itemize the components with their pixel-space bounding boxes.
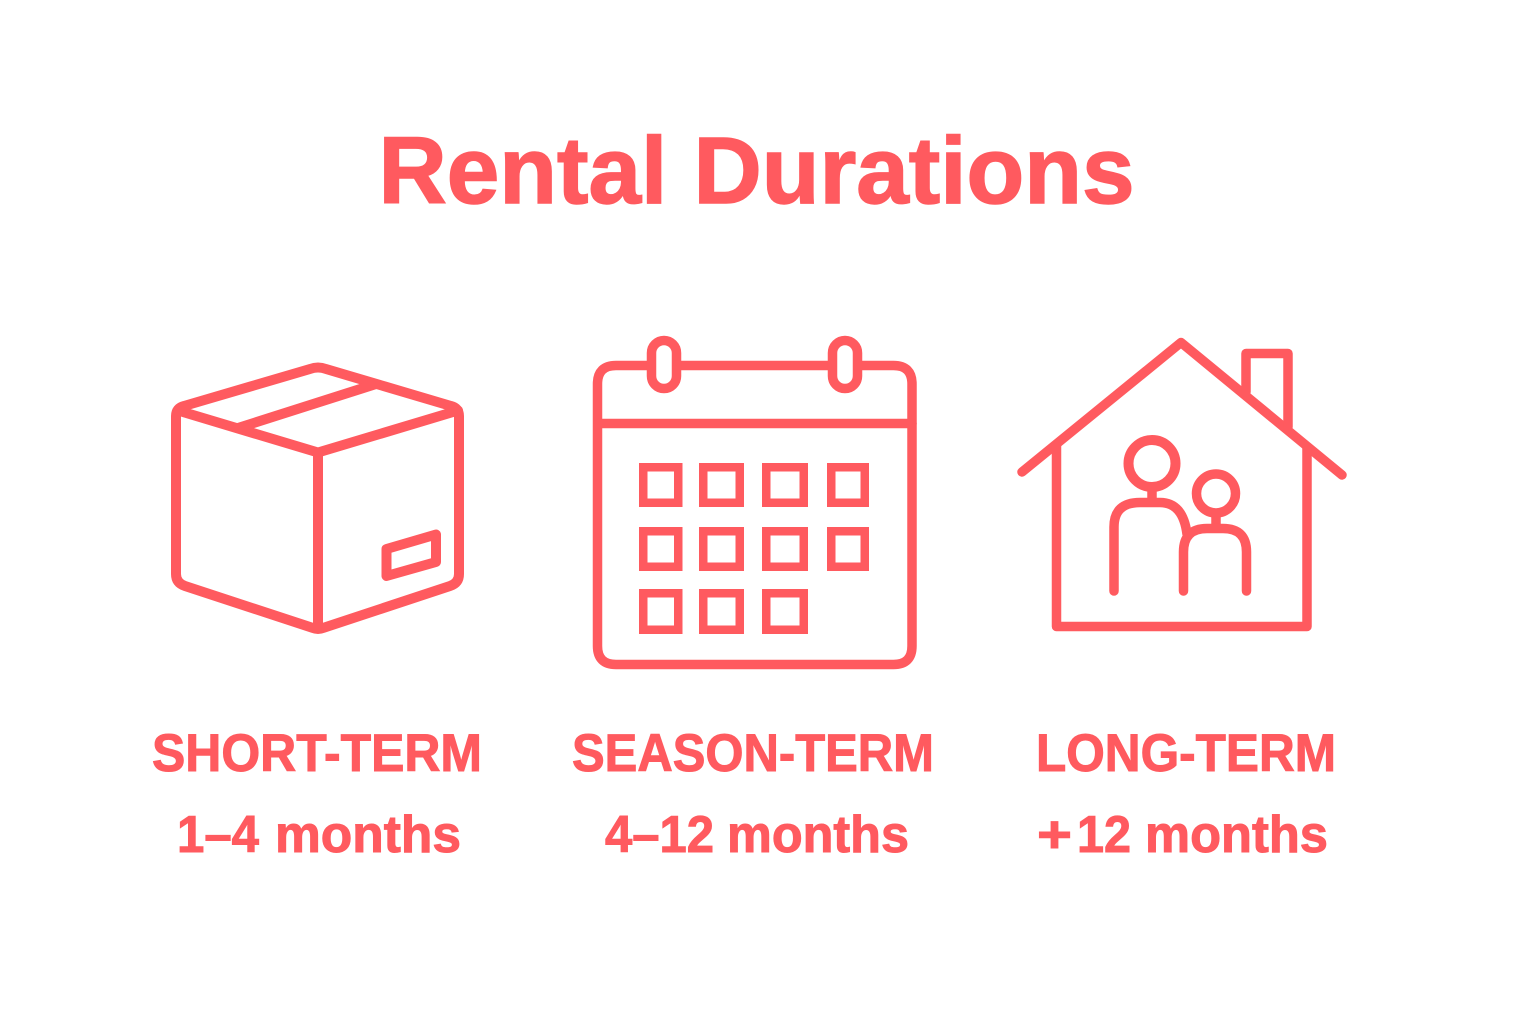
icon: box bbox=[176, 368, 459, 629]
duration: 4–12 months: 4–12 bbox=[605, 806, 714, 864]
duration: +12 months: months bbox=[1145, 806, 1328, 864]
duration: +12 months bbox=[1037, 806, 1328, 864]
duration: +12 months: 12 bbox=[1077, 806, 1131, 864]
heading: short-term: SHORT-TERM bbox=[152, 724, 482, 783]
label: short-term bbox=[152, 724, 482, 864]
heading: season-term: SEASON-TERM bbox=[572, 724, 934, 783]
duration: 1–4 months: 1–4 bbox=[177, 806, 259, 864]
label: season-term bbox=[572, 724, 934, 864]
label: long-term bbox=[1036, 724, 1336, 864]
duration: 4–12 months bbox=[605, 806, 909, 864]
icon: calendar bbox=[598, 340, 912, 664]
duration: 1–4 months bbox=[177, 806, 461, 864]
title: Rental Durations bbox=[378, 118, 1134, 224]
duration: 1–4 months: months bbox=[275, 806, 461, 864]
duration: +12 months: + bbox=[1037, 806, 1072, 864]
icon: house with family bbox=[1022, 342, 1342, 626]
duration: 4–12 months: months bbox=[727, 806, 909, 864]
heading: long-term: LONG-TERM bbox=[1036, 724, 1336, 783]
